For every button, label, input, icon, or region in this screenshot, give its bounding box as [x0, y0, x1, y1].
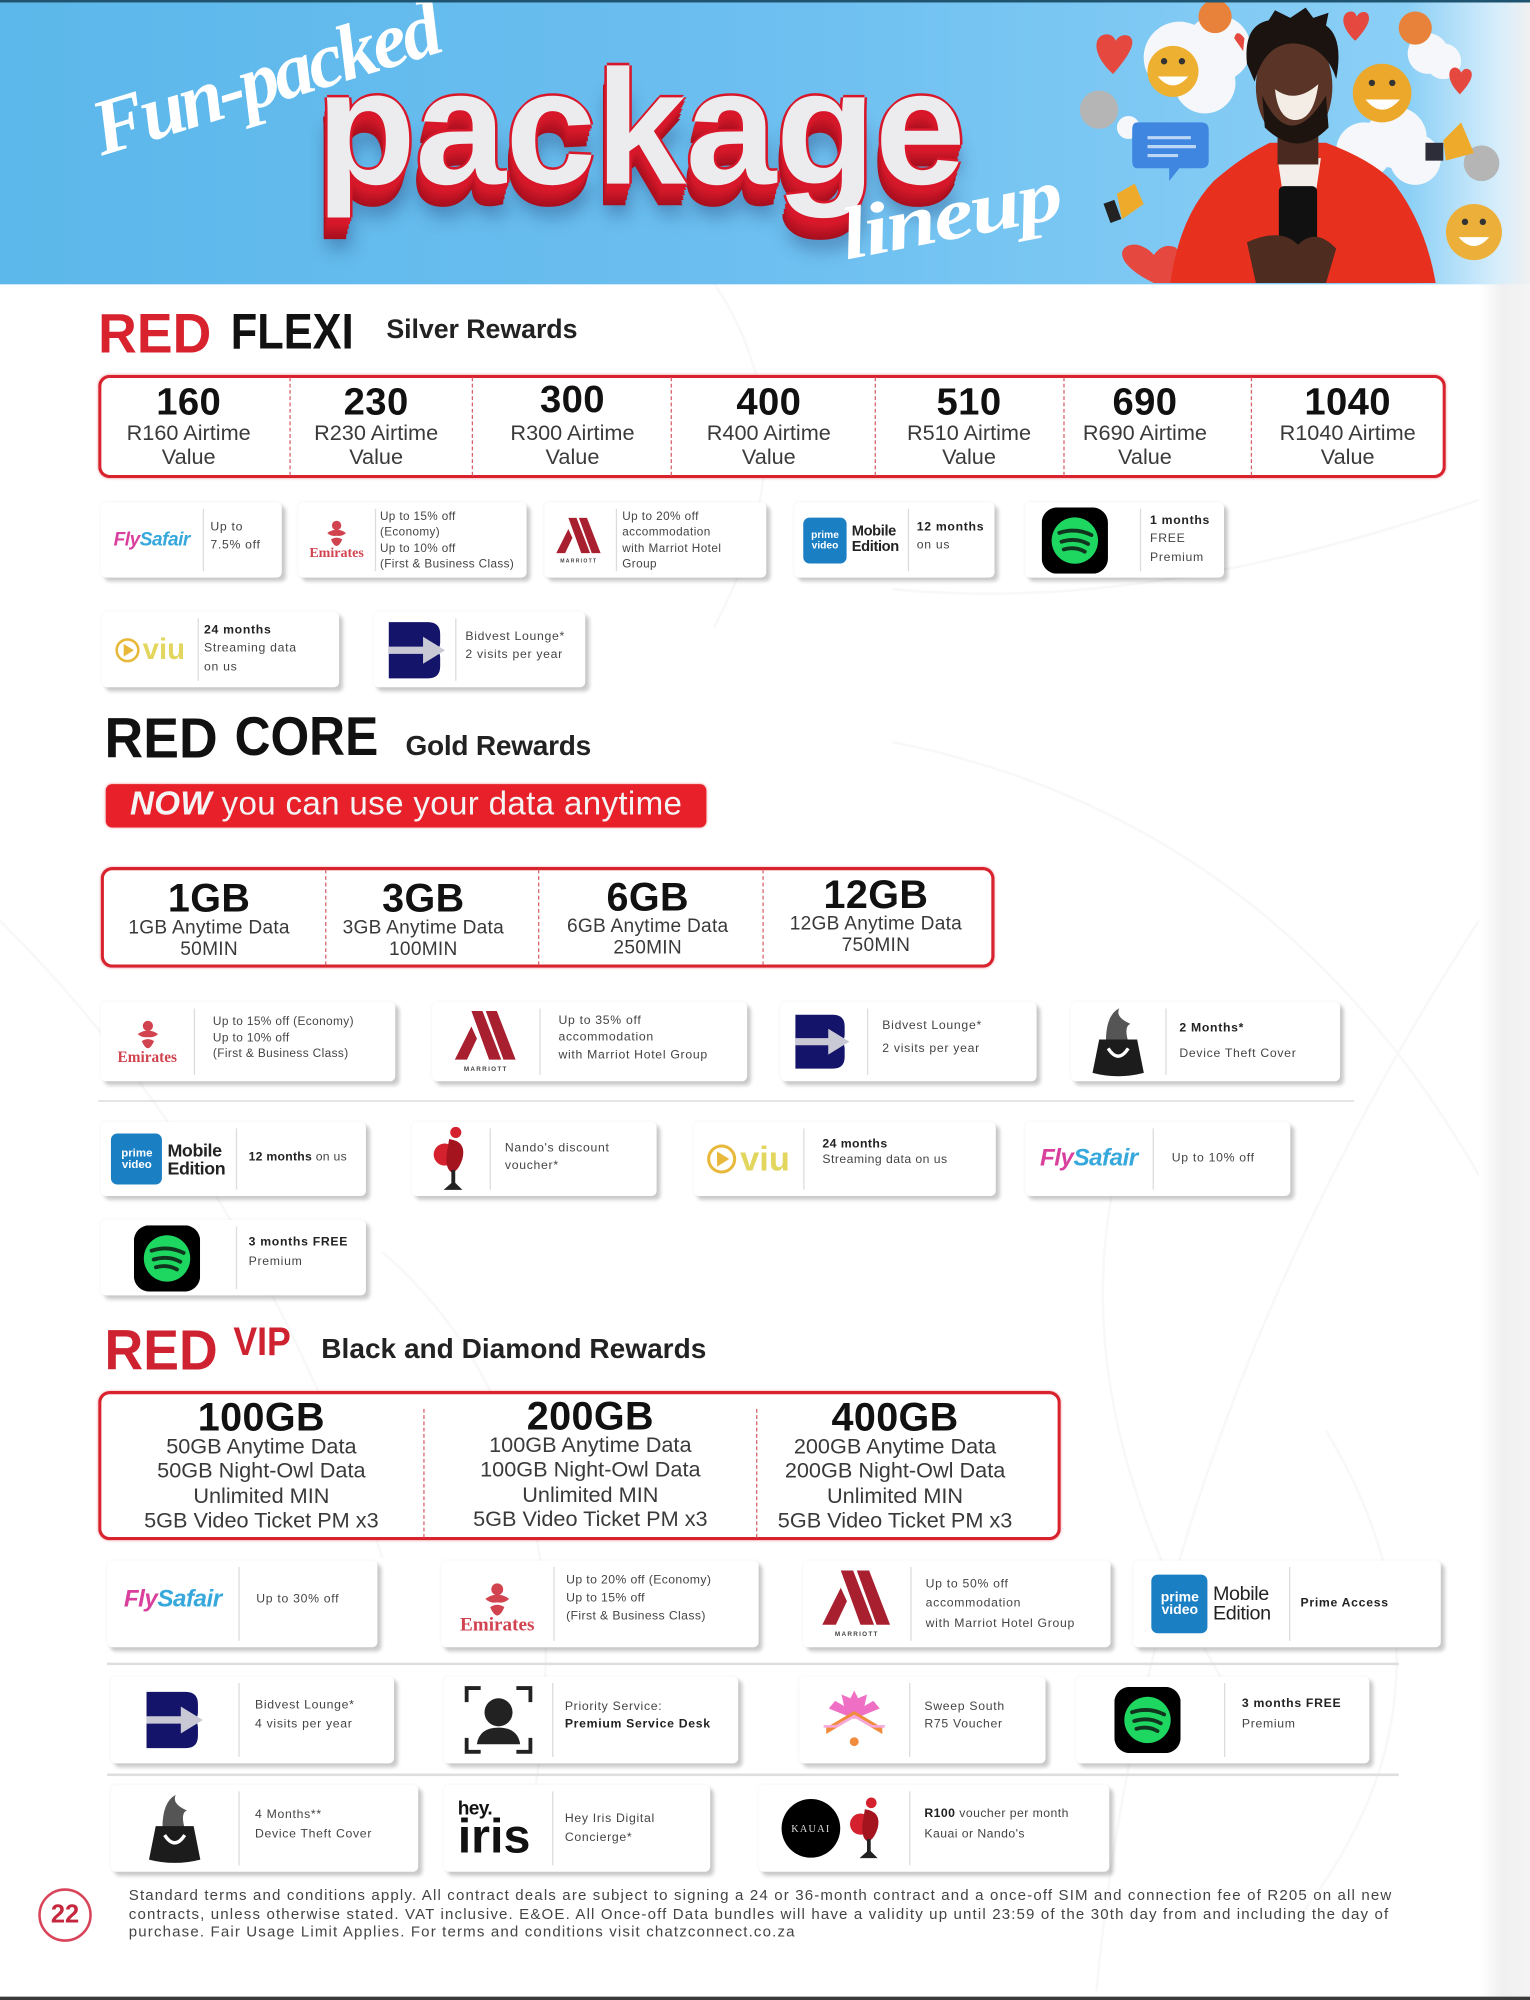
man: hands — [1247, 235, 1336, 283]
plan: 300 — [510, 379, 635, 469]
offer text — [465, 630, 565, 661]
offer text: Bidvest Lounge* — [882, 1019, 982, 1033]
plan: 160 — [127, 381, 251, 469]
page edge shading — [1479, 0, 1530, 2000]
plan: 1040: Value — [1321, 445, 1375, 469]
offer text — [380, 509, 514, 570]
plan: 400GB: Unlimited MIN — [827, 1484, 963, 1508]
offer text: 24 months — [204, 623, 271, 637]
offer text — [505, 1141, 610, 1172]
card: Emirates VIP — [441, 1561, 759, 1647]
plan: 300: Value — [546, 445, 599, 469]
logo: RED: RED — [105, 706, 218, 770]
plan: 400: Value — [742, 445, 796, 469]
offer text — [924, 1785, 1109, 1872]
icon: device theft cover — [1092, 1008, 1144, 1076]
offer text: 12 months — [917, 520, 984, 534]
offer text: 2 Months* — [1179, 1021, 1244, 1035]
offer text — [882, 1019, 982, 1056]
subheading: Silver Rewards: Silver Rewards — [386, 315, 577, 344]
offer text: Streaming data on us — [822, 1153, 948, 1167]
logo: viu — [694, 1122, 803, 1196]
plan: 100GB: 100GB — [198, 1395, 325, 1439]
offer text: R100 voucher per month — [924, 1806, 1069, 1820]
plan: 400: 400 — [736, 381, 801, 423]
top edge bar — [0, 0, 1530, 3]
offer text: Prime Access — [1300, 1597, 1389, 1611]
logo: Prime Video Mobile Edition: Edition — [167, 1158, 225, 1178]
footnote text: Standard terms and conditions apply. All contract deals are subject to signing a 24 or 36-month contract and a once-off SIM and connection fee of R205 on all new — [129, 1886, 1392, 1904]
logo: Prime Video Mobile Edition: Mobile — [852, 524, 896, 539]
logo: FlySafair: FlySafair — [124, 1586, 222, 1613]
card: Prime Video core — [101, 1122, 366, 1196]
offer text: Up to 20% off (Economy) — [566, 1573, 711, 1587]
table: RED CORE plans — [101, 867, 995, 968]
plan: 160: R160 Airtime — [127, 421, 251, 445]
plan: 400 — [707, 381, 831, 469]
offer text: 24 months — [822, 1137, 888, 1151]
logo: Emirates: Emirates — [118, 1048, 177, 1066]
logo: Prime Video Mobile Edition: prime — [1161, 1589, 1199, 1605]
logo: Prime Video Mobile Edition: Mobile — [167, 1140, 222, 1160]
man: phone — [1279, 186, 1317, 245]
logo: FlySafair: FlySafair — [1040, 1145, 1138, 1172]
table: RED VIP plans — [98, 1391, 1061, 1540]
offer text: Up to — [210, 520, 243, 534]
plan: 100GB: Unlimited MIN — [193, 1484, 329, 1508]
offer text — [926, 1561, 1111, 1647]
offer text: on us — [204, 660, 237, 674]
logo: Prime Video Mobile Edition — [803, 518, 899, 564]
offer text: Up to 10% off — [380, 541, 456, 554]
plan: 230: Value — [349, 445, 403, 469]
offer text: Up to 15% off — [566, 1591, 645, 1605]
offer text — [565, 1785, 710, 1872]
offer text: Up to 35% off — [558, 1013, 641, 1027]
offer text: 12 months on us — [249, 1150, 347, 1164]
logo: VIP: VIP — [233, 1319, 291, 1364]
offer text: 2 visits per year — [465, 647, 563, 661]
plan: 230: R230 Airtime — [314, 421, 438, 445]
plan: 3GB: 3GB — [382, 876, 465, 921]
offer text — [924, 1677, 1046, 1763]
plan: 12GB: 750MIN — [842, 935, 910, 956]
logo: Prime Video Mobile Edition: Edition — [1213, 1603, 1271, 1624]
offer text: 4 Months** — [255, 1807, 322, 1821]
offer text: Up to 15% off (Economy) — [213, 1015, 354, 1027]
plan: 6GB — [567, 875, 728, 959]
offer text: accommodation — [926, 1597, 1021, 1611]
plan: 400GB: 200GB Night-Owl Data — [785, 1459, 1005, 1483]
icon: grey phones — [1080, 91, 1499, 181]
logo: Prime Video Mobile Edition: video — [122, 1158, 152, 1170]
offer text: 3 months FREE — [249, 1235, 348, 1250]
card: Sweep South VIP — [799, 1677, 1046, 1763]
offer text — [1242, 1677, 1369, 1763]
man: jacket — [1170, 143, 1436, 283]
plan: 230: 230 — [344, 381, 409, 423]
logo: Bidvest — [111, 1677, 238, 1763]
logo: viu: viu — [143, 632, 185, 666]
section: RED CORE — [105, 706, 591, 770]
logo: Prime Video Mobile Edition: video — [1161, 1603, 1198, 1618]
plan: 1040 — [1280, 381, 1416, 469]
offer text: with Marriot Hotel Group — [926, 1616, 1075, 1630]
offer text: Up to 10% off — [1172, 1152, 1255, 1166]
icon: priority service person — [444, 1677, 552, 1763]
logo: Marriott — [556, 518, 601, 563]
card: FlySafair flexi — [101, 502, 282, 578]
plan: 6GB: 6GB Anytime Data — [567, 915, 728, 937]
section: RED FLEXI — [98, 302, 577, 364]
plan: 200GB: 200GB — [527, 1394, 654, 1438]
offer text: 4 visits per year — [255, 1717, 353, 1731]
offer text — [558, 1013, 708, 1062]
offer text: Concierge* — [565, 1831, 632, 1845]
logo: Emirates: Emirates — [309, 546, 364, 561]
page number: 22 — [51, 1901, 79, 1929]
plan: 200GB: 5GB Video Ticket PM x3 — [473, 1507, 708, 1531]
plan: 100GB: 50GB Night-Owl Data — [157, 1459, 366, 1483]
offer text — [1150, 514, 1210, 565]
card: Spotify core — [101, 1220, 366, 1295]
offer text: Up to 10% off — [213, 1031, 290, 1044]
plan: 230 — [314, 381, 438, 469]
card: Spotify VIP — [1076, 1677, 1369, 1763]
offer text: accommodation — [622, 525, 711, 538]
card: Marriott flexi — [544, 502, 766, 578]
offer text: Premium — [1150, 550, 1204, 565]
logo: Emirates: Emirates — [460, 1615, 534, 1635]
card: FlySafair VIP — [107, 1561, 377, 1647]
plan: 1GB — [128, 876, 290, 960]
plan: 1040: R1040 Airtime — [1280, 421, 1416, 445]
offer text: (First & Business Class) — [380, 557, 514, 570]
card: Spotify flexi — [1025, 502, 1224, 578]
logo: Emirates — [118, 1020, 177, 1066]
offer text — [213, 1015, 354, 1060]
plan: 1GB: 1GB — [168, 876, 250, 921]
logo: Bidvest — [795, 1014, 850, 1069]
plan: 12GB: 12GB — [824, 872, 928, 917]
logo: RED: RED — [98, 302, 211, 364]
card: Prime Video flexi — [794, 502, 994, 578]
plan: 200GB: 100GB Anytime Data — [489, 1433, 692, 1457]
card: Prime Video VIP — [1133, 1561, 1441, 1647]
plan: 510: R510 Airtime — [907, 421, 1031, 445]
logo: Prime Video Mobile Edition: Edition — [852, 539, 899, 554]
page number — [38, 1888, 92, 1942]
offer text: Bidvest Lounge* — [465, 630, 565, 644]
plan: 1GB: 1GB Anytime Data — [128, 917, 290, 938]
offer text: accommodation — [558, 1031, 654, 1045]
logo: Sweep South — [799, 1677, 909, 1763]
plan: 100GB — [140, 1397, 382, 1533]
plan: 400GB: 200GB Anytime Data — [794, 1434, 996, 1459]
offer text: Up to 15% off — [380, 509, 456, 522]
logo: Prime Video Mobile Edition: prime — [121, 1147, 152, 1160]
logo: Kauai and Nando's — [759, 1785, 909, 1872]
offer text — [917, 520, 984, 551]
man: shirt — [1278, 158, 1321, 210]
icon: thumbs — [1104, 122, 1474, 223]
card: Emirates flexi — [298, 502, 527, 578]
offer text: Device Theft Cover — [1179, 1047, 1296, 1061]
card: Bidvest core — [780, 1002, 1037, 1081]
offer text: 7.5% off — [210, 537, 261, 551]
offer text: Premium — [1242, 1717, 1296, 1731]
offer text: (Economy) — [380, 525, 440, 538]
banner: data anytime: NOW you can use your data anytime — [130, 784, 682, 822]
logo: Emirates — [309, 520, 364, 561]
section: RED VIP — [96, 1318, 720, 1377]
subheading: Black and Diamond Rewards: Black and Diamond Rewards — [321, 1332, 706, 1364]
offer text: Nando's discount — [505, 1141, 610, 1155]
card: theft cover core — [1071, 1002, 1340, 1081]
plan: 12GB: 12GB Anytime Data — [790, 913, 962, 935]
plan: 690: Value — [1118, 445, 1172, 469]
logo: Marriott: MARRIOTT — [464, 1066, 508, 1074]
banner title: package: package — [316, 37, 965, 219]
card: viu flexi — [102, 612, 339, 687]
offer text: (First & Business Class) — [566, 1609, 706, 1623]
offer text: with Marriot Hotel — [622, 541, 721, 554]
plan: 6GB: 6GB — [606, 875, 689, 919]
logo: Marriott — [803, 1561, 910, 1647]
icon: chat bubble — [1132, 122, 1209, 181]
logo: Prime Video Mobile Edition: video — [812, 539, 838, 550]
plan: 510: Value — [942, 445, 996, 469]
footnote text: contracts, unless otherwise stated. VAT inclusive. E&OE. All Once-off Data bundles will have a validity up until 23:59 of the 30th day from and including the day of — [129, 1904, 1389, 1922]
plan: 1040: 1040 — [1304, 381, 1391, 423]
offer text: Kauai or Nando's — [924, 1827, 1025, 1841]
plan: 400GB: 5GB Video Ticket PM x3 — [778, 1508, 1012, 1532]
logo: Spotify — [1042, 508, 1108, 574]
offer text — [822, 1122, 996, 1196]
card: Emirates core — [101, 1002, 395, 1081]
card: Nando's core — [412, 1122, 657, 1196]
plan: 100GB: 50GB Anytime Data — [166, 1434, 357, 1459]
card: hey iris VIP — [444, 1785, 710, 1872]
offer text — [565, 1677, 738, 1763]
plan: 510 — [907, 381, 1031, 469]
offer text: Group — [622, 557, 657, 570]
logo: viu: viu — [740, 1139, 790, 1177]
card: Marriott core — [432, 1002, 747, 1081]
offer text: Streaming data — [204, 642, 297, 656]
plan: 200GB: Unlimited MIN — [522, 1482, 658, 1507]
offer text: Premium Service Desk — [565, 1717, 711, 1731]
card: Bidvest VIP — [111, 1677, 394, 1763]
offer text: FREE — [1150, 532, 1185, 546]
plan: 690: R690 Airtime — [1083, 421, 1207, 445]
plan: 12GB — [790, 872, 962, 956]
logo: Prime Video Mobile Edition — [1133, 1561, 1289, 1647]
offer text: voucher* — [505, 1158, 559, 1172]
card: Priority Service VIP — [444, 1677, 738, 1763]
offer text — [204, 623, 297, 674]
offer text — [1179, 1021, 1296, 1061]
plan: 510: 510 — [937, 381, 1001, 423]
offer text: (First & Business Class) — [213, 1047, 349, 1060]
offer text: Up to 20% off — [622, 509, 699, 522]
offer text — [210, 520, 261, 551]
plan: 400GB: 400GB — [831, 1395, 959, 1439]
banner — [0, 3, 1530, 284]
offer text: with Marriot Hotel Group — [558, 1048, 708, 1062]
logo: Emirates — [441, 1561, 553, 1647]
logo: Marriott: MARRIOTT — [560, 557, 597, 563]
plan: 400: R400 Airtime — [707, 421, 831, 445]
plan: 3GB: 100MIN — [389, 938, 458, 960]
icon: hearts — [1096, 11, 1472, 283]
plan: 690: 690 — [1112, 381, 1177, 423]
logo: Prime Video Mobile Edition — [110, 1134, 225, 1184]
plan: 6GB: 250MIN — [613, 937, 682, 959]
logo: Marriott: MARRIOTT — [835, 1631, 879, 1638]
banner script: lineup: lineup — [833, 152, 1067, 276]
man: neck and head — [1256, 31, 1332, 164]
offer text: Up to 50% off — [926, 1577, 1009, 1591]
logo: FLEXI: FLEXI — [231, 304, 354, 361]
offer text — [255, 1677, 394, 1763]
logo: RED: RED — [105, 1318, 218, 1382]
icon: clouds — [1117, 15, 1461, 185]
card: Bidvest flexi — [374, 612, 585, 687]
plan: 100GB: 5GB Video Ticket PM x3 — [144, 1508, 379, 1532]
logo: CORE: CORE — [235, 707, 378, 768]
offer text — [622, 509, 721, 570]
plan: 200GB — [469, 1396, 711, 1532]
logo: Kauai and Nando's: KAUAI — [791, 1823, 831, 1834]
logo: Spotify — [1076, 1677, 1219, 1763]
man: hair — [1246, 8, 1338, 82]
bottom edge bar — [0, 1997, 1530, 2000]
plan: 200GB: 100GB Night-Owl Data — [480, 1458, 701, 1482]
logo: hey iris — [444, 1785, 552, 1872]
logo: viu — [115, 632, 185, 666]
offer text: 3 months FREE — [1242, 1697, 1341, 1711]
offer text — [566, 1561, 759, 1647]
icon: device theft cover — [111, 1785, 238, 1872]
offer text: Bidvest Lounge* — [255, 1698, 355, 1712]
card: FlySafair core — [1025, 1122, 1290, 1196]
plan: 160: 160 — [156, 381, 221, 423]
logo: Prime Video Mobile Edition: Mobile — [1213, 1583, 1269, 1605]
plan: 1GB: 50MIN — [180, 938, 238, 960]
card: viu core — [694, 1122, 996, 1196]
card: theft cover VIP — [111, 1785, 418, 1872]
subheading: Gold Rewards: Gold Rewards — [405, 729, 591, 761]
offer text: Hey Iris Digital — [565, 1812, 655, 1826]
banner illustration: man with phone, emojis and hearts — [1080, 2, 1502, 283]
offer text: Up to 30% off — [256, 1593, 339, 1607]
offer text: Priority Service: — [565, 1700, 662, 1714]
logo: FlySafair: FlySafair — [114, 529, 190, 551]
offer text: on us — [917, 537, 950, 551]
table: RED FLEXI plans — [98, 375, 1446, 478]
plan: 300: 300 — [540, 379, 605, 421]
plan: 690 — [1083, 381, 1207, 469]
logo: Nando's rooster — [434, 1126, 464, 1190]
offer text: R75 Voucher — [924, 1717, 1003, 1731]
offer text — [255, 1785, 418, 1872]
plan: 3GB — [343, 876, 504, 960]
icon: smileys — [1148, 0, 1502, 260]
offer text: Premium — [249, 1254, 302, 1268]
plan: 3GB: 3GB Anytime Data — [343, 917, 504, 938]
logo: Bidvest — [388, 622, 445, 678]
plan: 300: R300 Airtime — [510, 421, 635, 445]
plan: 400GB — [774, 1397, 1016, 1533]
offer text: Device Theft Cover — [255, 1827, 372, 1841]
logo: Marriott — [454, 1011, 516, 1074]
card: Kauai and Nando's VIP — [759, 1785, 1109, 1872]
card: Marriott VIP — [803, 1561, 1111, 1647]
offer text: Sweep South — [924, 1700, 1005, 1714]
logo: Prime Video Mobile Edition: prime — [811, 529, 839, 540]
footnote text — [129, 1886, 1392, 1942]
offer text — [249, 1220, 366, 1295]
footnote text: purchase. Fair Usage Limit Applies. For terms and conditions visit chatzconnect.co.za — [129, 1923, 796, 1941]
plan: 160: Value — [162, 445, 216, 469]
logo: hey iris: hey. — [458, 1797, 492, 1819]
logo: hey iris: iris — [458, 1810, 530, 1863]
offer text: 2 visits per year — [882, 1042, 980, 1056]
logo: Spotify — [101, 1220, 233, 1295]
offer text: 1 months — [1150, 514, 1210, 528]
